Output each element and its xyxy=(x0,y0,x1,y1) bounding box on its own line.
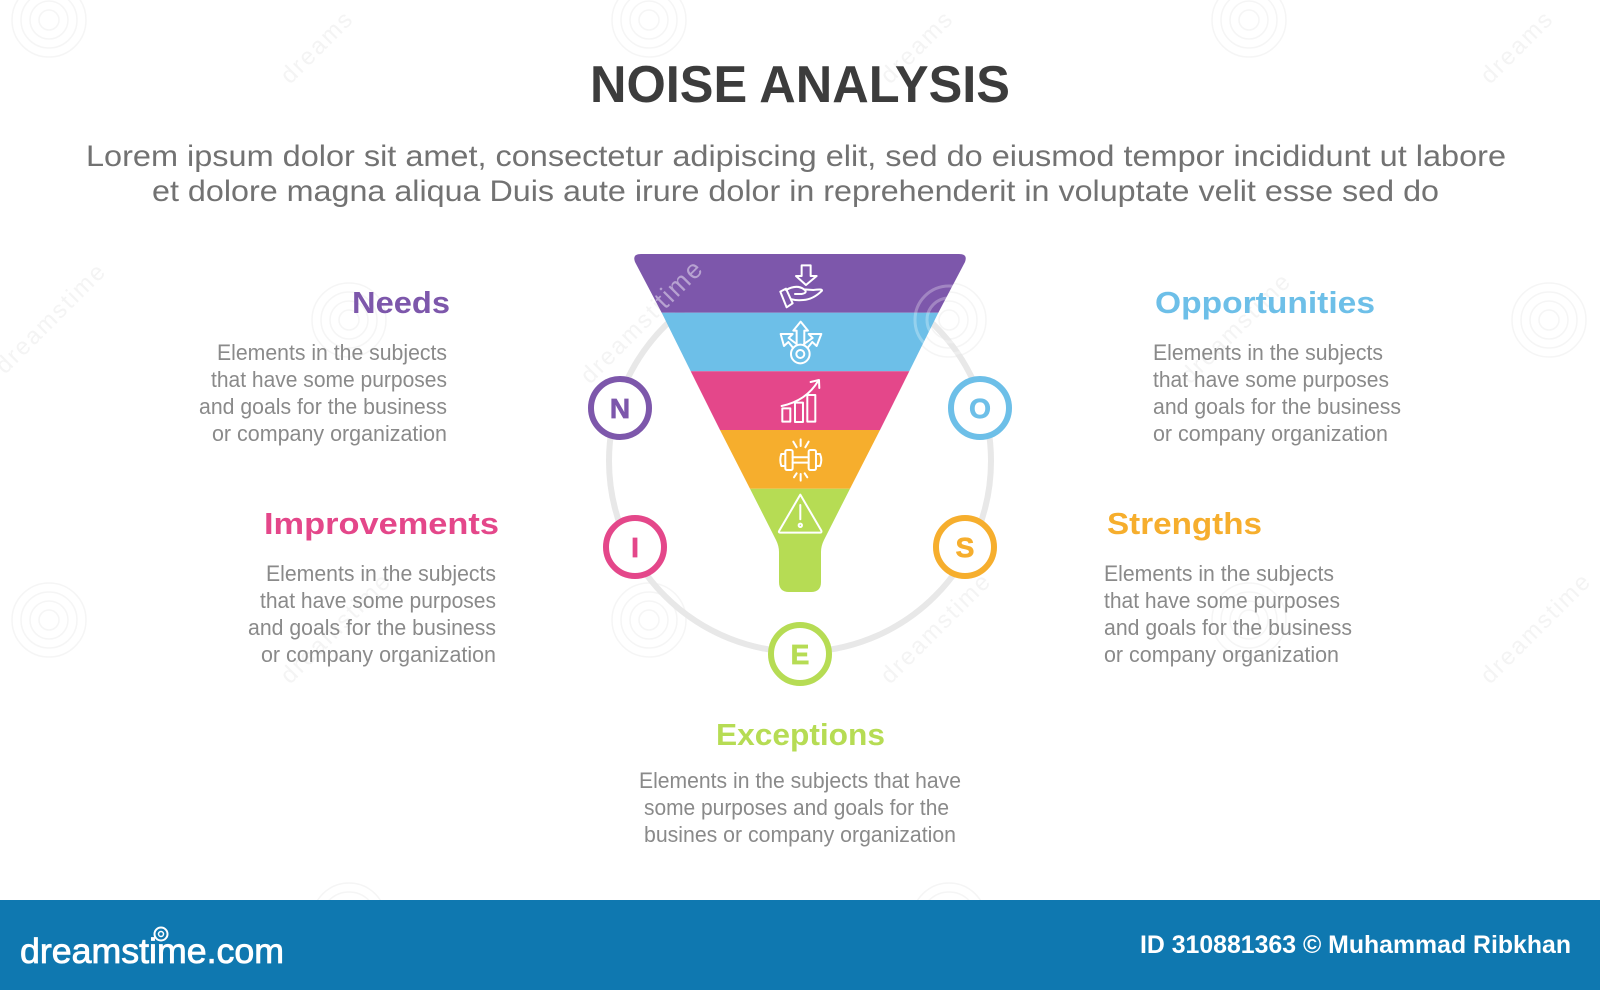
block: Strengths: Strengths xyxy=(1107,506,1262,541)
block: Strengths: and goals for the business xyxy=(1104,615,1352,640)
block: Improvements: that have some purposes xyxy=(260,588,496,613)
block: Exceptions: Exceptions xyxy=(716,717,885,752)
icon: growth bar chart xyxy=(782,380,819,422)
block: Improvements: and goals for the business xyxy=(248,615,496,640)
funnel band: blue xyxy=(662,313,938,371)
title: NOISE ANALYSIS xyxy=(590,56,1010,114)
block: Strengths: that have some purposes xyxy=(1104,588,1340,613)
funnel band: orange xyxy=(720,430,880,489)
block: Opportunities xyxy=(1153,285,1401,446)
badge: O: O xyxy=(969,393,991,424)
footer logo: dreamstime.com xyxy=(20,932,284,971)
icon: dumbbell xyxy=(780,439,821,481)
badge: E xyxy=(771,625,829,683)
badge: N: N xyxy=(610,393,630,424)
block: Exceptions: some purposes and goals for the xyxy=(644,795,949,820)
subtitle text xyxy=(86,140,1506,208)
text: dreams xyxy=(1475,5,1559,89)
block: Improvements: Elements in the subjects xyxy=(266,561,496,586)
block: Opportunities: that have some purposes xyxy=(1153,367,1389,392)
block: Exceptions: busines or company organization xyxy=(644,822,956,847)
text: dreamstime xyxy=(875,567,997,689)
funnel band: purple xyxy=(634,254,966,313)
block: Exceptions: Elements in the subjects that have xyxy=(639,768,961,793)
badge: I xyxy=(606,518,664,576)
block: Needs: and goals for the business xyxy=(199,394,447,419)
footer credit: ID 310881363 © Muhammad Ribkhan xyxy=(1140,931,1571,959)
funnel band: green with neck xyxy=(750,489,850,592)
badge: N xyxy=(591,379,649,437)
block: Opportunities: Elements in the subjects xyxy=(1153,340,1383,365)
footer bar xyxy=(0,900,1600,990)
ring behind funnel xyxy=(609,270,991,652)
text: dreamstime xyxy=(1175,267,1297,389)
badge: I: I xyxy=(631,532,639,563)
block: Opportunities: Opportunities xyxy=(1155,285,1375,320)
subtitle text: Lorem ipsum dolor sit amet, consectetur adipiscing elit, sed do eiusmod tempor incididunt ut labore xyxy=(86,140,1506,173)
badge: O xyxy=(951,379,1009,437)
text: dreams xyxy=(275,5,359,89)
text: dreamstime xyxy=(275,567,397,689)
badge: S: S xyxy=(956,532,974,563)
text: dreams xyxy=(875,5,959,89)
block: Improvements: Improvements xyxy=(264,506,499,541)
icon: hand receiving arrow xyxy=(780,265,822,307)
subtitle text: et dolore magna aliqua Duis aute irure dolor in reprehenderit in voluptate velit esse sed do xyxy=(152,175,1439,208)
block: Needs: Needs xyxy=(352,285,450,320)
funnel watermark overlay: time xyxy=(648,253,710,314)
block: Opportunities: or company organization xyxy=(1153,421,1388,446)
block: Strengths: Elements in the subjects xyxy=(1104,561,1334,586)
block: Exceptions xyxy=(639,717,961,847)
block: Opportunities: and goals for the business xyxy=(1153,394,1401,419)
funnel watermark overlay xyxy=(648,253,983,354)
block: Needs: that have some purposes xyxy=(211,367,447,392)
icon: three arrows from target xyxy=(781,322,821,363)
block: Strengths: or company organization xyxy=(1104,642,1339,667)
text: dreamstime xyxy=(575,267,697,389)
block: Improvements: or company organization xyxy=(261,642,496,667)
text: dreamstime xyxy=(1475,567,1597,689)
block: Needs: or company organization xyxy=(212,421,447,446)
block: Improvements xyxy=(248,506,499,667)
badge: E: E xyxy=(791,639,809,670)
block: Needs: Elements in the subjects xyxy=(217,340,447,365)
block: Needs xyxy=(199,285,450,446)
funnel band: pink xyxy=(691,371,909,430)
badge: S xyxy=(936,518,994,576)
funnel chart xyxy=(634,254,966,592)
icon: warning triangle xyxy=(779,495,821,533)
block: Strengths xyxy=(1104,506,1352,667)
